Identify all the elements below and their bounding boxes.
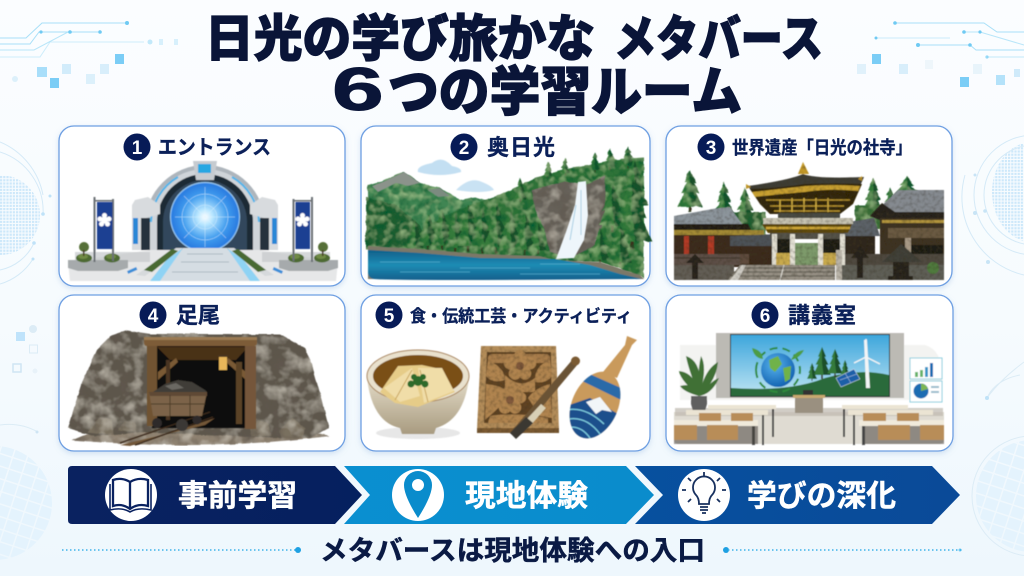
panel: 4 ashio: [59, 295, 345, 451]
decoration: left floating squares: [13, 325, 38, 374]
decoration: right dotted globe: [962, 135, 1024, 275]
heading: oku-nikko: 奥日光: [487, 135, 555, 160]
heading: oku-nikko: [450, 134, 555, 160]
heading: ashio: [140, 302, 220, 328]
panel: 5 food crafts activities: [361, 295, 650, 451]
decoration: bottom-right grid globe: [958, 362, 1024, 556]
heading: oku-nikko: 2: [459, 138, 469, 159]
heading: lecture room: [752, 302, 856, 328]
illustration: carved wood panel: [477, 346, 559, 433]
title: [205, 11, 823, 123]
panel: 2 oku-nikko: [361, 126, 652, 286]
decoration: bottom-left grid globe: [0, 424, 52, 560]
title: 日光の学び旅かな: [205, 11, 595, 67]
heading: lecture room: 講義室: [788, 303, 856, 328]
illustration: yuba soup bowl: [367, 350, 469, 439]
step 2: on-site experience: 現地体験: [465, 480, 588, 513]
step 3: deepening learning: 学びの深化: [747, 480, 896, 513]
illustration: nikko shrine gate: [674, 162, 944, 280]
illustration: classroom: [674, 333, 944, 445]
step 1: prior learning: 事前学習: [178, 480, 297, 513]
process flow: [68, 466, 960, 524]
illustration: portal gate: [68, 161, 338, 281]
heading: world heritage shrines: 3: [706, 138, 716, 159]
title: つの学習ルーム: [388, 63, 742, 122]
decoration: top-left circuit: [0, 21, 178, 88]
illustration: painted paddle: [568, 336, 638, 440]
step 2: on-site experience: [344, 466, 654, 524]
heading: entrance: 1: [132, 138, 143, 159]
tagline: メタバースは現地体験への入口: [320, 536, 705, 566]
heading: ashio: 4: [148, 306, 159, 327]
step 3: deepening learning: [635, 466, 960, 524]
panel: 3 world heritage: [666, 126, 952, 286]
illustration: mine entrance: [68, 330, 330, 446]
illustration: carving tool: [510, 356, 580, 439]
panel: 1 entrance: [59, 126, 345, 286]
heading: food crafts activities: 5: [384, 306, 395, 327]
decoration: left dotted globe: [0, 142, 52, 284]
heading: food crafts activities: [376, 302, 632, 328]
heading: food crafts activities: 食・伝統工芸・アクティビティ: [410, 306, 632, 326]
decoration: top-right circuit: [857, 21, 1024, 87]
icon: map pin: [392, 469, 444, 521]
icon: open book: [105, 469, 157, 521]
title: 6: [332, 56, 384, 123]
heading: entrance: [124, 134, 271, 160]
heading: world heritage shrines: 世界遺産「日光の社寺」: [732, 138, 912, 158]
heading: lecture room: 6: [760, 306, 770, 327]
heading: world heritage shrines: [698, 134, 912, 160]
title: メタバース: [614, 13, 823, 67]
illustration: mountain lake and waterfall: [366, 146, 652, 280]
step 1: prior learning: [68, 466, 362, 524]
panel: 6 lecture room: [666, 295, 953, 451]
icon: light bulb: [678, 469, 730, 521]
heading: ashio: 足尾: [176, 303, 220, 328]
heading: entrance: エントランス: [158, 137, 271, 159]
decoration: right dotted line: [723, 547, 962, 553]
decoration: left dotted line: [62, 547, 301, 553]
